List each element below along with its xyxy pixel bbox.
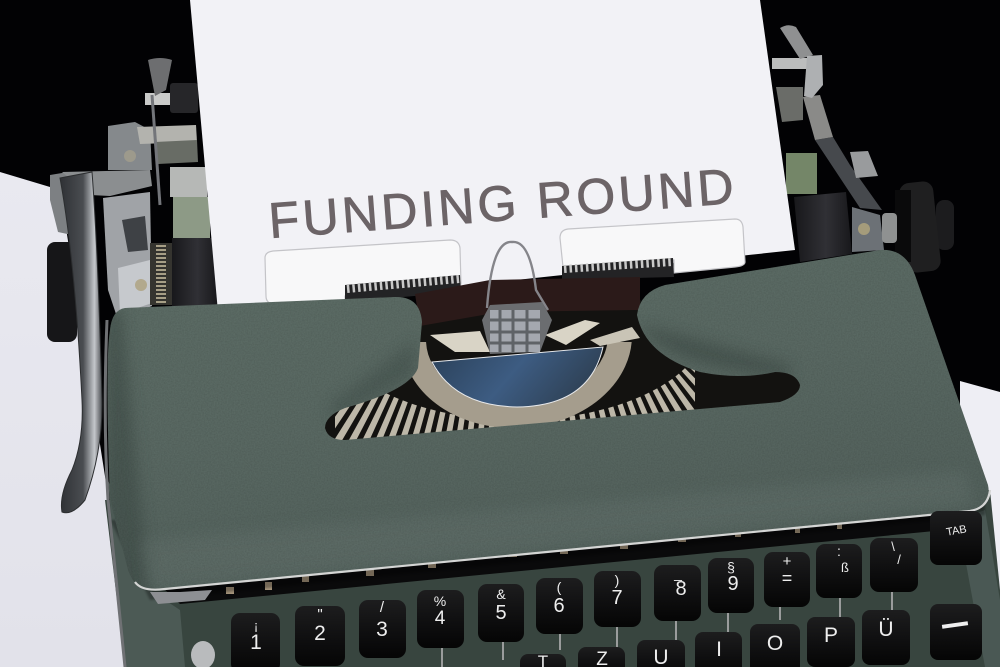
light arm [803,95,833,140]
key legends: ) [615,572,619,588]
key legends: 7 [611,587,623,609]
thin lever stem [152,95,160,205]
key legends: \ [891,539,895,554]
top strip [137,125,197,144]
key legends: _ [673,565,682,581]
left rod cylinder [170,83,198,113]
lever inner arm [105,320,125,667]
key legends: ß [841,560,849,575]
lever shelf [62,170,152,196]
type bar wires [442,590,892,667]
key legends: / [897,552,901,567]
plate opening [122,216,148,252]
dark arm [815,137,882,210]
key legends: TAB [945,523,968,539]
tan slider tabs [226,523,842,594]
key legends: + [783,553,792,570]
key legends: 4 [435,608,446,629]
silver lever bottom left [191,641,215,667]
right carriage mechanism [772,25,954,274]
cream type bar far right [590,327,640,346]
key legends: 8 [675,578,687,600]
right silver plate [852,207,884,252]
type bar basket spokes [335,342,695,440]
ribbon [415,277,640,326]
right rod [772,58,812,69]
key legends: ¡ [254,618,258,633]
bright plate highlight [118,260,152,314]
left feed comb [345,275,461,302]
grey back plate [776,87,803,122]
left gear [150,243,173,305]
basket ring [412,342,632,427]
right black roller [794,192,852,262]
key legends: & [496,586,506,602]
key legends: 5 [495,602,507,624]
paper sheet [190,0,795,312]
right paper guide [560,219,745,273]
left rod [145,93,170,105]
title: FUNDING ROUND: FUNDING ROUND [267,158,736,249]
top lever [780,25,813,59]
key legends: = [782,568,792,588]
cover shadow [110,500,985,600]
grey strip [155,140,198,164]
ribbed knob [898,180,942,274]
key legends: ( [557,579,562,595]
small right tab [850,151,878,178]
right green block [786,153,817,194]
carriage return lever [60,172,102,513]
mechanism backdrop [320,300,815,452]
left platen knob [47,242,77,342]
white table right [960,381,1000,667]
typewriter body below cover [105,490,1000,667]
right side panel [958,510,1000,667]
key legends: § [727,559,735,575]
cover shading [100,245,1000,600]
blue segment shield [432,347,603,407]
knob end [936,200,954,250]
key legends: Ü [878,618,894,641]
silver cylinder [882,213,897,243]
ribbon vibrator wire loop [487,242,548,310]
key legends: 1 [250,631,262,654]
large side plate [103,192,152,320]
left screws [135,279,147,291]
right feed comb [562,258,674,280]
type guide [482,302,552,354]
thumb lever [148,58,172,96]
key legends: : [837,543,841,559]
key legends: 2 [314,622,326,645]
panel: green typewriter cover [108,250,989,590]
key legends: 6 [553,595,565,617]
left carriage mechanism [47,58,218,342]
left side panel [108,480,185,667]
left clip [50,172,72,235]
curved bracket [804,55,823,98]
knob hub [895,190,911,262]
key legends: 3 [376,618,388,641]
key legends: O [767,632,783,655]
silver block [170,167,207,197]
dark gap strip under lip [160,503,980,604]
key legends: % [434,593,446,609]
key legends: " [317,606,323,623]
upper plate [108,122,152,170]
row of number keys [231,511,982,667]
left black roller [172,238,218,308]
chrome lip line [135,490,990,590]
key legends: I [716,638,722,661]
cream type bar left [430,331,490,352]
chrome corner trim [150,590,212,604]
left paper guide [265,240,461,304]
green block [173,197,210,240]
cream type bar right [545,320,600,345]
key legends [250,523,968,667]
key legends: / [380,599,385,616]
white table left [0,172,135,667]
right screw [858,223,870,235]
key legends: 9 [727,573,739,595]
key legends: P [824,624,838,647]
